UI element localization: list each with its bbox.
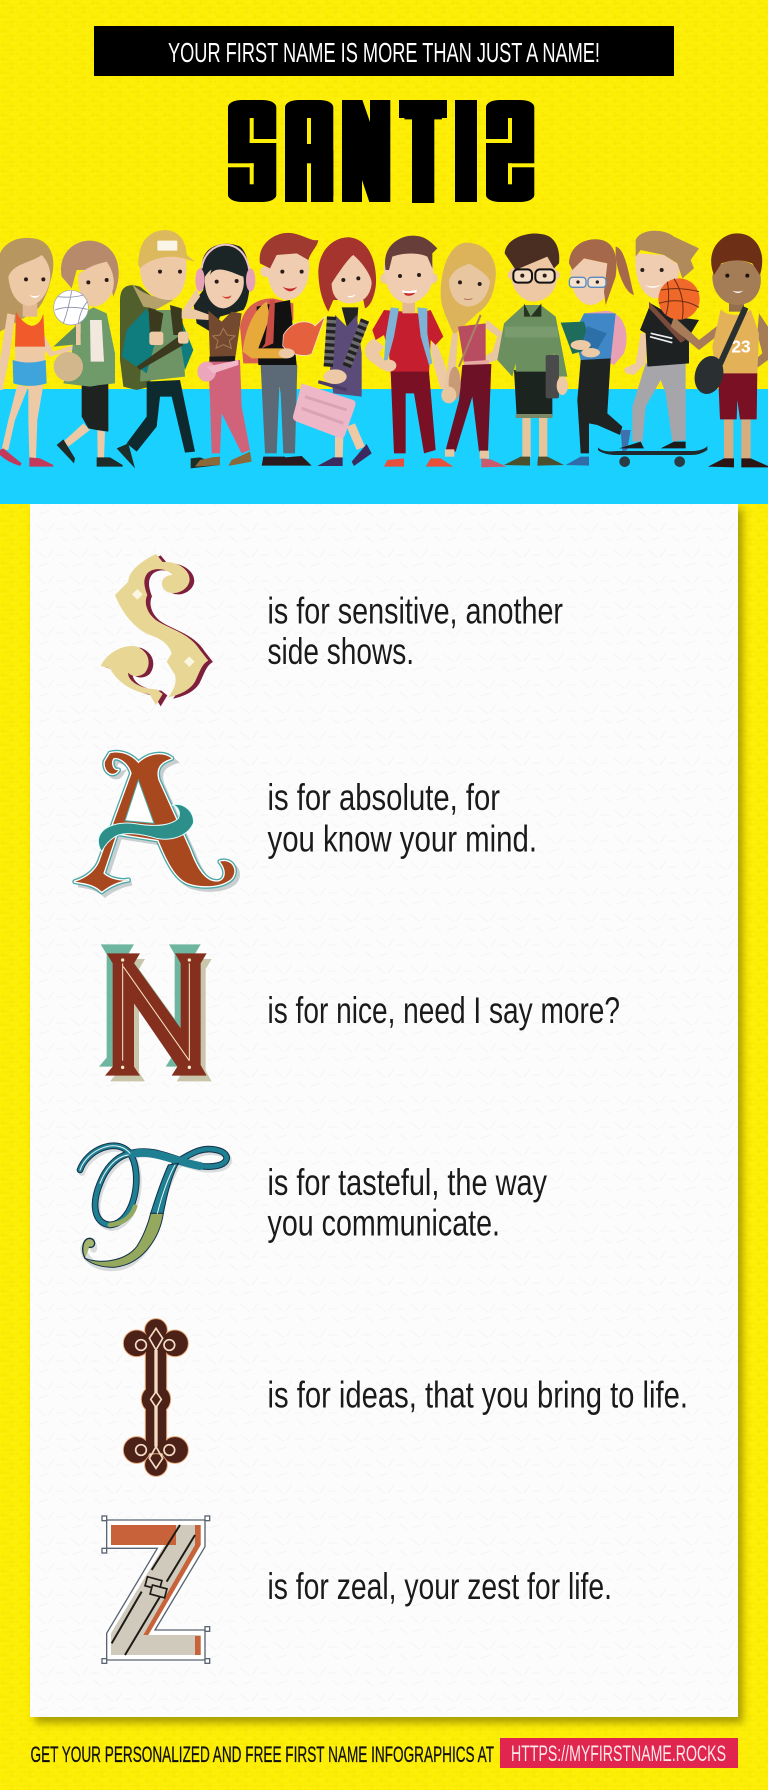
icon: ornamental letter Z [102,1516,210,1663]
footer call to action: GET YOUR PERSONALIZED AND FREE FIRST NAME INFOGRAPHICS AT [30,1742,494,1767]
title: SANTIZ: SANTIZ [230,82,529,229]
icon: ornamental letter N [99,944,212,1081]
illustration: group of twelve students [0,230,768,468]
text: A line: you know your mind. [268,818,537,860]
row: S [101,554,563,706]
text: S line: is for sensitive, another [268,590,563,632]
figure: boy with book [240,233,325,466]
text: S line: side shows. [268,631,414,672]
figure: boy in yellow tank: 23 [731,337,751,357]
right six figures [365,231,768,467]
text: N line: is for nice, need I say more? [268,990,620,1031]
text: A line: is for absolute, for [268,777,500,818]
icon: ornamental letter A [75,752,238,895]
row: N [99,944,620,1081]
row: T [80,1146,547,1268]
headline banner [94,26,674,76]
text: Z line: is for zeal, your zest for life. [268,1566,612,1607]
icon: ornamental letter S [101,554,213,706]
icon: ornamental script letter T [80,1146,229,1268]
row: Z [102,1516,612,1663]
figure: boy in yellow tank [690,233,768,467]
figure: girl with ponytail and tablet [561,239,634,466]
figure: boy on skateboard with basketball [598,231,721,467]
figure: girl with headphones [182,244,255,467]
icon: basketball [658,278,700,320]
figure: girl with volleyball [53,241,123,467]
figure: boy with glasses [497,234,568,466]
left six figures [0,230,376,468]
figure: backpacker with cap [117,230,220,468]
icon: skateboard [598,446,707,467]
blue ground band [0,389,768,504]
figure: boy in red tee [365,236,455,467]
figure: girl with pink case [293,237,376,466]
icon: black glasses [513,269,555,283]
icon: volleyball [54,290,88,325]
figure: girl in orange top [0,238,80,467]
text: T line: is for tasteful, the way [268,1162,547,1203]
figure: blonde girl [441,243,507,467]
icon: ornamental letter I [123,1319,188,1476]
row: I [123,1319,688,1476]
icon: pink case [293,382,356,438]
panel: white letters card [30,504,743,1723]
icon: blue glasses [569,277,606,287]
icon: open book [283,317,325,355]
text: T line: you communicate. [268,1202,500,1244]
row: A [75,752,537,895]
